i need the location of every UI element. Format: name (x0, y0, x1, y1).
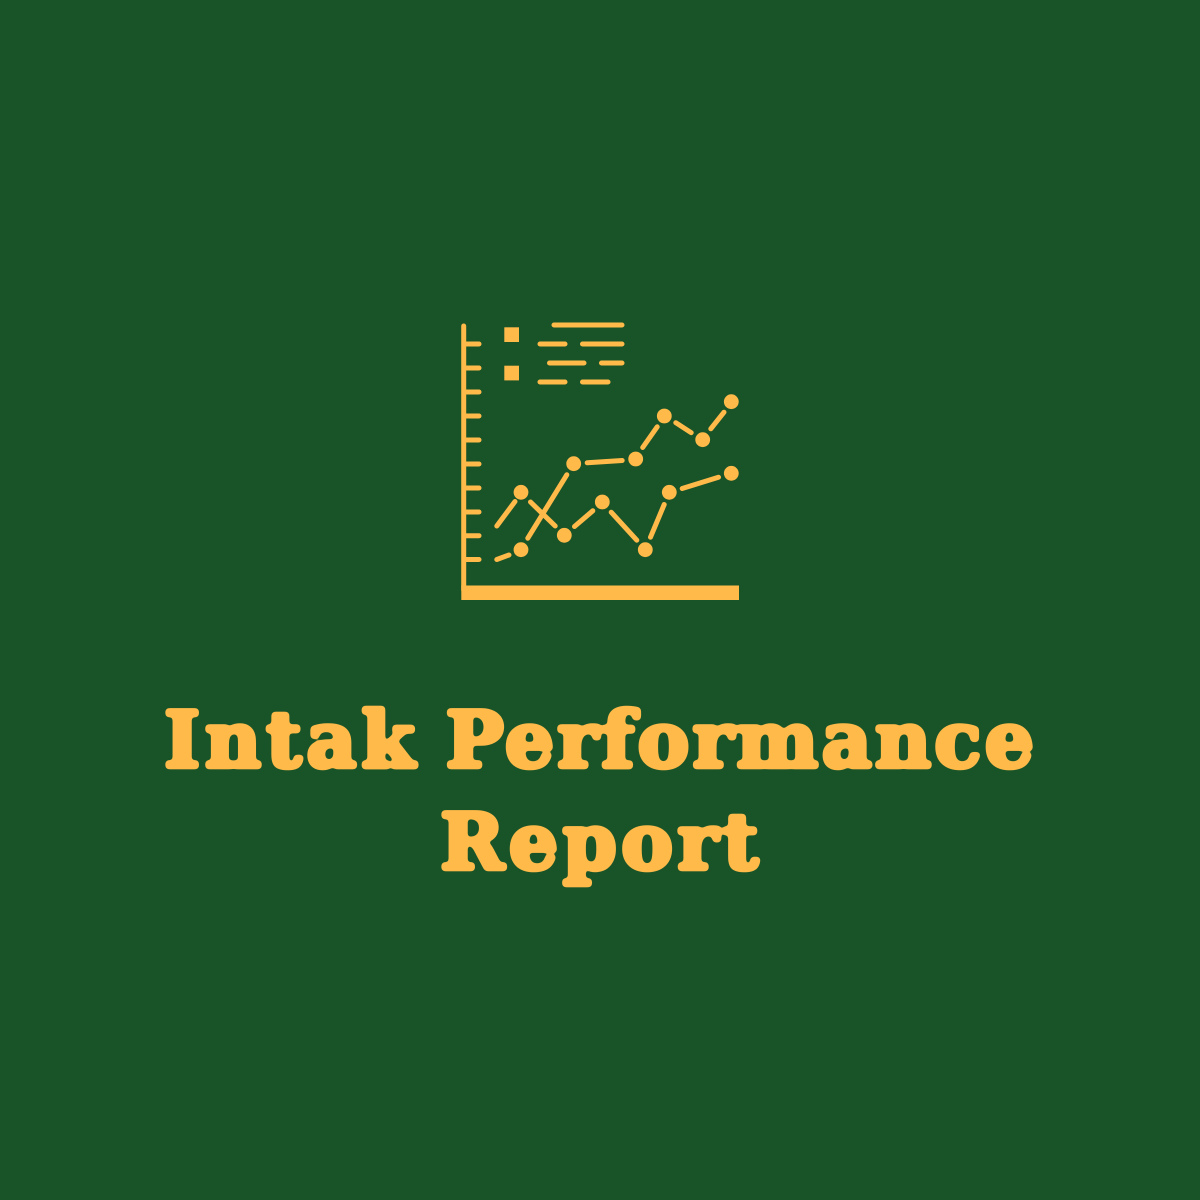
icon: line chart report (461, 325, 739, 600)
line series: lower trend (497, 466, 739, 557)
chart axes with tick marks (461, 326, 739, 600)
title (164, 695, 1034, 888)
line series: upper trend (497, 394, 739, 560)
title: Report (440, 797, 759, 888)
title: Intak (164, 695, 417, 786)
legend (504, 325, 622, 382)
title: Performance (446, 695, 1034, 786)
